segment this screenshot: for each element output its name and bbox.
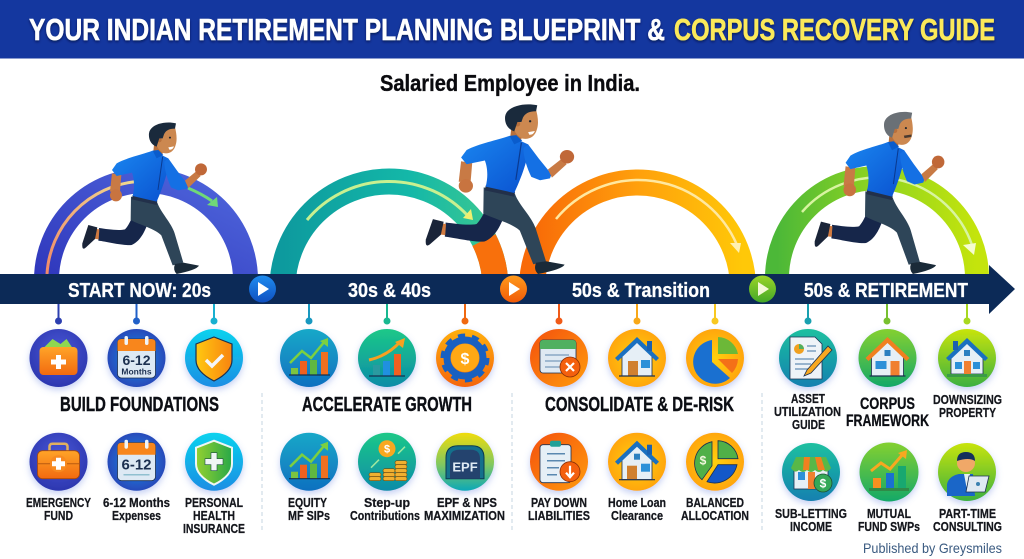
label: asset utilization guide: UTILIZATION xyxy=(774,405,841,419)
icon: house xyxy=(608,329,666,387)
label: EPF and NPS maximization xyxy=(424,496,505,523)
label: emergency fund xyxy=(26,496,92,523)
label: downsizing property: PROPERTY xyxy=(939,406,997,420)
label: pay down liabilities: LIABILITIES xyxy=(528,509,590,523)
label: personal health insurance: PERSONAL xyxy=(185,496,243,510)
icon: sub-letting shop: $ xyxy=(820,476,827,490)
label: part-time consulting: CONSULTING xyxy=(933,520,1002,534)
icon: sub-letting shop xyxy=(782,443,840,501)
label: asset utilization guide: ASSET xyxy=(791,392,825,406)
play button: blue xyxy=(249,276,276,302)
label: corpus framework xyxy=(846,394,930,430)
icon: asset guide document xyxy=(779,329,837,387)
icon: calendar 6-12 months xyxy=(108,329,166,387)
icon: gear with dollar xyxy=(436,329,494,387)
label: home loan clearance xyxy=(608,496,666,523)
label: downsizing property: DOWNSIZING xyxy=(933,393,1002,407)
label: mutual fund SWPs: FUND SWPs xyxy=(858,520,920,534)
icon: growth arrow chart xyxy=(358,329,416,387)
label: corpus framework: CORPUS xyxy=(860,394,915,413)
bar label: 30s and 40s: 30s & 40s xyxy=(348,280,431,302)
icon: calendar with cross xyxy=(530,329,588,387)
label: personal health insurance xyxy=(183,496,245,536)
icon: calendar 6-12 months: 6-12 xyxy=(122,352,151,368)
icon: calendar 6-12: 6-12 xyxy=(121,457,152,474)
icon: equity chart xyxy=(280,329,338,387)
label: pay down liabilities: PAY DOWN xyxy=(531,496,587,510)
label: downsizing property xyxy=(933,393,1002,420)
icon: SIP chart xyxy=(280,433,338,491)
icon: home loan house xyxy=(608,433,666,491)
header banner xyxy=(0,0,1024,58)
label: part-time consulting xyxy=(933,507,1002,534)
heading: accelerate growth: ACCELERATE GROWTH xyxy=(302,394,472,416)
label: 6-12 months expenses: Expenses xyxy=(112,509,161,523)
runner: mid career xyxy=(426,104,574,274)
label: EPF and NPS maximization: EPF & NPS xyxy=(437,496,497,510)
label: emergency fund: EMERGENCY xyxy=(26,496,92,510)
label: balanced allocation: ALLOCATION xyxy=(681,509,749,523)
label: home loan clearance: Clearance xyxy=(611,509,663,523)
arc: 20s xyxy=(46,180,246,280)
heading: build foundations: BUILD FOUNDATIONS xyxy=(60,394,219,416)
icon: step-up coins: $ xyxy=(384,444,390,456)
label: step-up contributions: Contributions xyxy=(350,509,420,523)
label: 6-12 months expenses: 6-12 Months xyxy=(103,496,170,510)
icon: health shield xyxy=(185,433,243,491)
icon: pie chart xyxy=(686,329,744,387)
connector pins xyxy=(56,304,970,324)
icon: consulting person xyxy=(938,443,996,501)
arc: 50s retirement xyxy=(777,178,977,278)
label: equity MF SIPs xyxy=(288,496,330,523)
label: step-up contributions: Step-up xyxy=(364,496,410,510)
label: mutual fund SWPs: MUTUAL xyxy=(867,507,911,521)
icon: calendar 6-12 months: Months xyxy=(121,366,152,376)
label: corpus framework: FRAMEWORK xyxy=(846,411,930,430)
icon: shield with check xyxy=(185,329,243,387)
label: asset utilization guide: GUIDE xyxy=(792,418,825,432)
label: balanced allocation xyxy=(681,496,749,523)
label: equity MF SIPs: EQUITY xyxy=(288,496,328,510)
subtitle: Salaried Employee in India. xyxy=(380,70,640,96)
label: mutual fund SWPs xyxy=(858,507,920,534)
icon: step-up coins xyxy=(358,433,416,491)
icon: corpus house xyxy=(858,329,916,387)
icon: balanced allocation pie: $ xyxy=(700,454,707,468)
label: part-time consulting: PART-TIME xyxy=(939,507,996,521)
icon: balanced allocation pie xyxy=(686,433,744,491)
label: sub-letting income: SUB-LETTING xyxy=(775,507,847,521)
publisher credit: Published by Greysmiles xyxy=(863,540,1002,556)
label: personal health insurance: HEALTH xyxy=(193,509,235,523)
arc: 30s and 40s xyxy=(282,181,496,288)
icon: pay down clipboard xyxy=(530,433,588,491)
icon: calendar 6-12 xyxy=(108,433,166,491)
label: balanced allocation: BALANCED xyxy=(686,496,744,510)
icon: downsizing house xyxy=(938,329,996,387)
label: pay down liabilities xyxy=(528,496,590,523)
label: equity MF SIPs: MF SIPs xyxy=(288,509,330,523)
title: YOUR INDIAN RETIREMENT PLANNING BLUEPRINT & xyxy=(29,13,665,47)
icon: emergency wallet xyxy=(30,329,88,387)
bar label: start now: START NOW: 20s xyxy=(68,280,211,302)
arc: 50s transition xyxy=(532,180,743,288)
label: emergency fund: FUND xyxy=(44,509,73,523)
bar label: 50s transition: 50s & Transition xyxy=(572,280,710,302)
icon: gear with dollar: $ xyxy=(461,351,470,368)
icon: emergency briefcase xyxy=(30,433,88,491)
label: sub-letting income xyxy=(775,507,847,534)
label: home loan clearance: Home Loan xyxy=(608,496,666,510)
label: sub-letting income: INCOME xyxy=(790,520,832,534)
icon: EPF vault xyxy=(436,433,494,491)
label: personal health insurance: INSURANCE xyxy=(183,522,245,536)
label: asset utilization guide xyxy=(774,392,841,432)
label: step-up contributions xyxy=(350,496,420,523)
runner: young professional xyxy=(82,123,207,274)
play button: green xyxy=(749,276,776,302)
bar label: 50s retirement: 50s & RETIREMENT xyxy=(804,280,968,302)
play button: orange xyxy=(500,276,527,302)
heading: consolidate and de-risk: CONSOLIDATE & DE-RISK xyxy=(545,394,734,416)
icon: SWP chart xyxy=(860,442,918,502)
runner: older professional xyxy=(815,112,944,274)
icon: EPF vault: EPF xyxy=(452,460,478,475)
label: EPF and NPS maximization: MAXIMIZATION xyxy=(424,509,505,523)
label: 6-12 months expenses xyxy=(103,496,170,523)
timeline arrow bar xyxy=(0,265,1015,314)
